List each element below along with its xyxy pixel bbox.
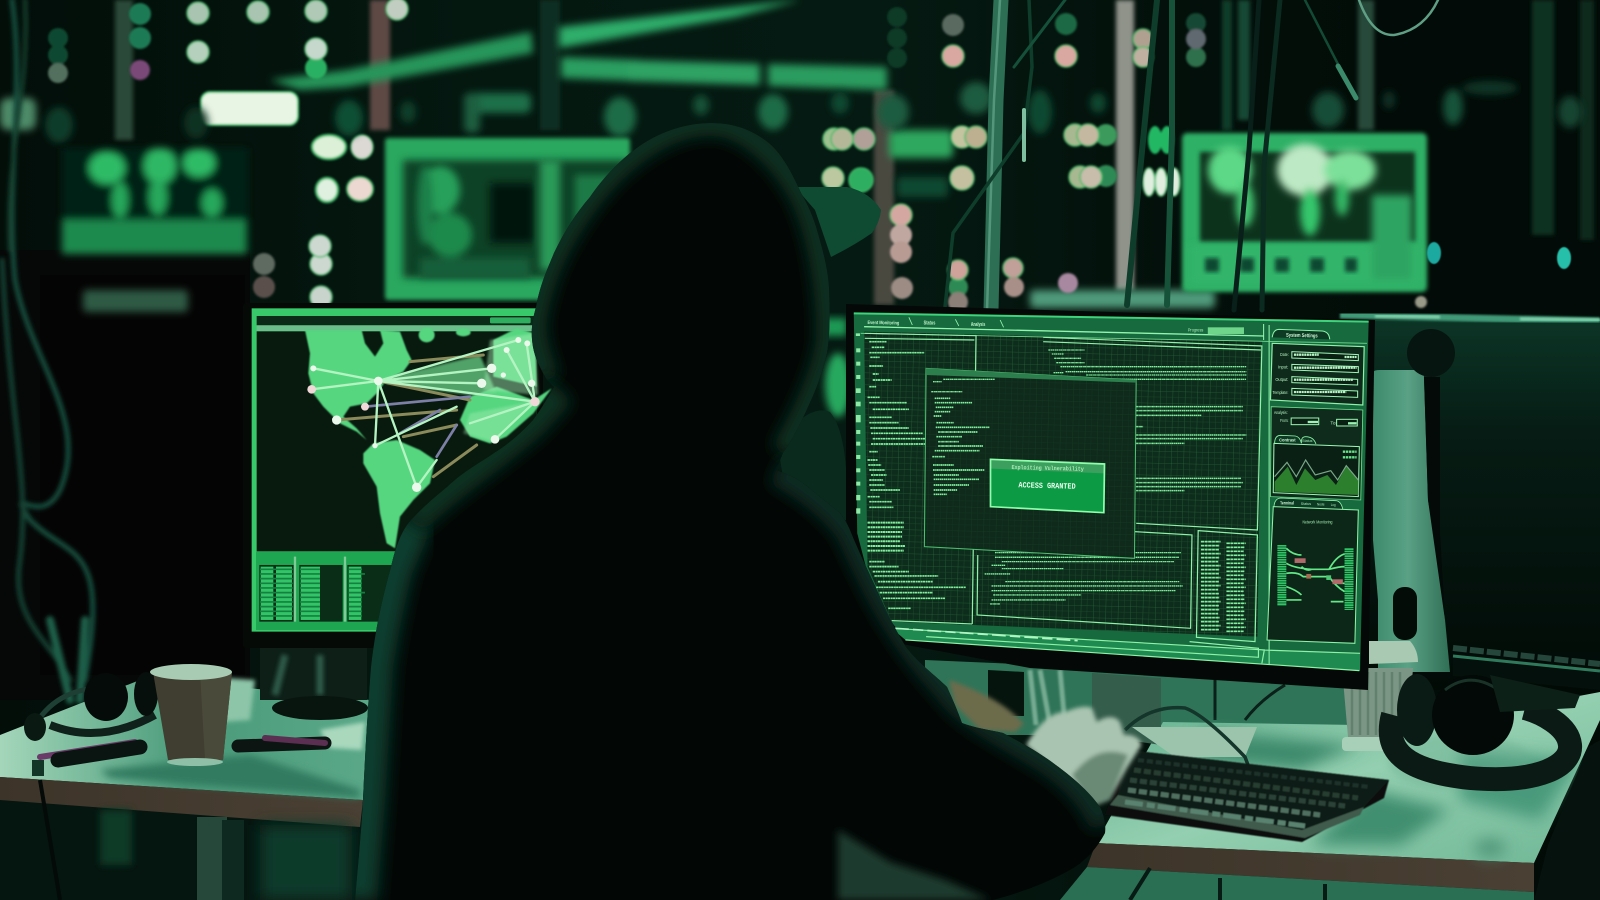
settings sidebar: Analysis:	[1274, 410, 1288, 416]
green glow and second figure behind the hood	[779, 318, 851, 520]
settings sidebar: Template:	[1273, 390, 1288, 396]
network diagram panel: Network Monitoring	[1303, 519, 1333, 524]
network diagram panel: Log	[1331, 502, 1336, 507]
right back panel: dark monitor, white tower	[1340, 315, 1600, 690]
settings sidebar: Output:	[1275, 377, 1288, 383]
network diagram panel: Terminal	[1280, 501, 1294, 506]
settings sidebar: From:	[1280, 418, 1288, 424]
left tangled cables	[2, 0, 93, 700]
background monitor: world map right	[1182, 133, 1427, 292]
connection lines	[312, 340, 535, 487]
body shape	[355, 123, 1105, 900]
screen drawn in zoom coordinates	[854, 313, 1369, 671]
network diagram panel: Status	[1301, 501, 1311, 506]
left panel code lines	[868, 342, 966, 608]
tab bar: Analysis	[971, 322, 985, 328]
hand: left fingers behind the arm	[949, 680, 1024, 732]
main workspace	[864, 332, 1262, 637]
white tower	[1373, 370, 1450, 672]
dark box behind the headphones	[1490, 675, 1580, 712]
network diagram panel	[1267, 498, 1358, 643]
headphones right	[1388, 674, 1570, 790]
bottom status bar	[895, 628, 1078, 641]
person: hooded silhouette	[355, 123, 1105, 900]
teal indicator lights	[1427, 242, 1571, 269]
settings sidebar: Status	[1302, 438, 1313, 443]
settings sidebar: Contrast	[1279, 438, 1296, 444]
top lit edge	[1340, 315, 1600, 321]
settings sidebar: System Settings	[1286, 333, 1318, 339]
monitor stand	[1092, 673, 1257, 765]
under left desk: table leg and shadows	[40, 780, 352, 900]
tab bar: Status	[924, 321, 936, 327]
left toolbar icons	[856, 333, 861, 514]
dense light fan between continents	[383, 355, 497, 395]
under right desk	[1060, 867, 1534, 900]
tab bar: Progress	[1188, 328, 1204, 334]
panel outlines	[865, 333, 1360, 671]
main monitor	[846, 304, 1375, 765]
hanging cables	[945, 0, 1438, 310]
settings sidebar: Input:	[1278, 364, 1288, 370]
left desk objects: pen and clip	[38, 738, 325, 776]
access granted dialog	[991, 459, 1104, 513]
wall behind the right desk	[925, 660, 1385, 735]
network diagram panel: Node	[1317, 502, 1325, 507]
data table	[256, 552, 396, 630]
blurred green light bars at the top	[0, 0, 1215, 312]
area chart	[1273, 443, 1359, 497]
microphone ball	[1407, 329, 1455, 377]
left headphones	[24, 672, 158, 741]
bright white indicator strip	[201, 92, 298, 125]
access granted dialog: Exploiting Vulnerability	[1011, 464, 1084, 473]
continents	[305, 328, 552, 548]
hand on keyboard	[1026, 707, 1141, 807]
bezel	[846, 304, 1375, 690]
left desk	[0, 675, 370, 827]
access granted dialog: ACCESS GRANTED	[1018, 481, 1076, 492]
settings sidebar: Date:	[1280, 352, 1289, 358]
tab bar: Event Monitoring	[868, 320, 899, 326]
background keyboard	[1453, 648, 1600, 690]
map nodes	[307, 337, 540, 492]
left monitor	[243, 303, 552, 648]
paper cup left	[150, 664, 232, 766]
right desk	[1087, 692, 1600, 892]
keyboard	[1105, 750, 1389, 842]
list panel columns	[1201, 542, 1246, 631]
tab bar	[861, 317, 1367, 665]
background monitor: code window centre	[385, 138, 630, 300]
settings sidebar	[1270, 329, 1364, 500]
tower cut-out	[1393, 587, 1417, 640]
top-right panel text	[1048, 350, 1246, 491]
map screen, drawn in zoom coordinates	[252, 308, 552, 632]
bottom panel text	[985, 553, 1183, 604]
background monitor: world map left	[62, 148, 248, 254]
cap brim	[795, 187, 881, 257]
dim background light blobs	[45, 81, 1582, 143]
soft rim light on hoodie	[355, 123, 1105, 900]
bokeh lights	[48, 0, 1427, 312]
left monitor stand	[260, 645, 368, 720]
paper cup right, behind monitor	[1342, 641, 1418, 751]
dark chair at far right	[1534, 740, 1600, 900]
settings sidebar: To:	[1330, 421, 1337, 427]
overlay window	[924, 368, 1136, 558]
under-arm gap showing dim desk legs	[838, 830, 990, 900]
